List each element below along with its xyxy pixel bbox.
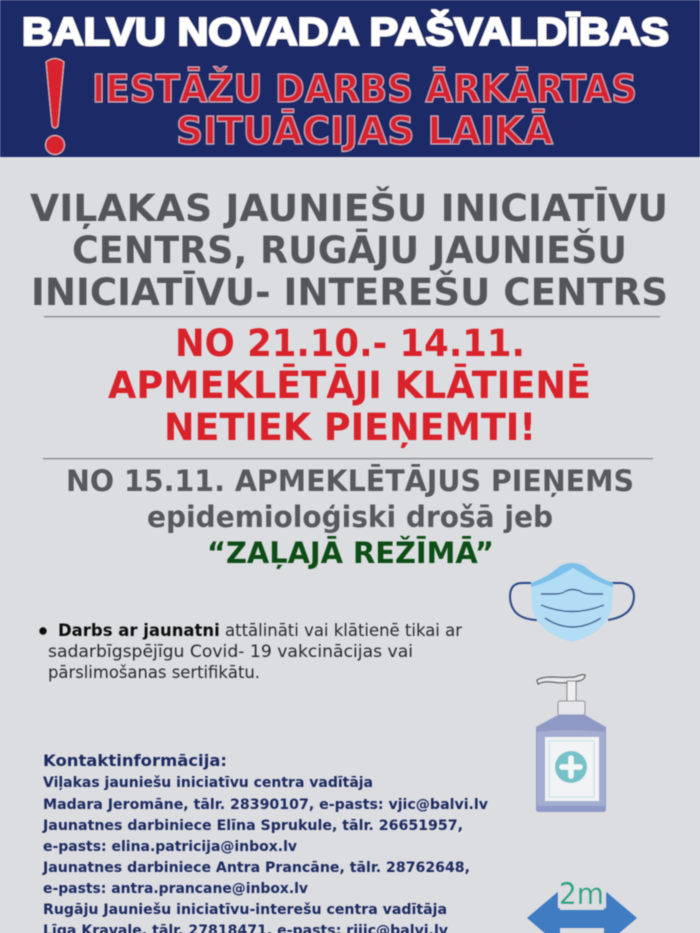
notice: visitors not accepted: NETIEK PIEŅEMTI! bbox=[164, 406, 536, 449]
bullet text: sadarbīgspējīgu Covid- 19 vakcinācijas vai bbox=[48, 642, 413, 661]
icon: exclamation mark bbox=[46, 58, 64, 154]
contact information: Jaunatnes darbiniece Elīna Sprukule, tālr. 26651957, bbox=[42, 818, 463, 834]
contact information bbox=[42, 751, 488, 933]
bullet text: pārslimošanas sertifikātu. bbox=[48, 663, 260, 682]
icon: face mask bbox=[510, 563, 634, 642]
heading: youth centres: VIĻAKAS JAUNIEŠU INICIATĪVU bbox=[30, 186, 668, 230]
bullet text bbox=[39, 621, 462, 682]
heading: youth centres bbox=[30, 186, 668, 314]
header subtitle: IESTĀŽU DARBS ĀRKĀRTAS bbox=[92, 67, 637, 111]
main text bbox=[30, 186, 668, 933]
contact information: Kontaktinformācija: bbox=[43, 751, 227, 770]
header subtitle bbox=[92, 67, 637, 153]
header subtitle: SITUĀCIJAS LAIKĀ bbox=[176, 109, 554, 153]
contact information: Madara Jeromāne, tālr. 28390107, e-pasts: vjic@balvi.lv bbox=[43, 797, 488, 813]
notice: green regime: NO 15.11. APMEKLĒTĀJUS PIEŅEMS bbox=[66, 464, 634, 498]
header title: BALVU NOVADA PAŠVALDĪBAS bbox=[22, 9, 669, 54]
heading: youth centres: INICIATĪVU- INTEREŠU CENTRS bbox=[31, 270, 668, 314]
notice: visitors not accepted: APMEKLĒTĀJI KLĀTIENĒ bbox=[108, 363, 591, 407]
notice: green regime bbox=[66, 464, 634, 570]
notice: green regime: epidemioloģiski drošā jeb bbox=[147, 500, 553, 534]
notice: visitors not accepted bbox=[108, 322, 591, 449]
heading: youth centres: CENTRS, RUGĀJU JAUNIEŠU bbox=[72, 228, 627, 272]
contact information: Viļakas jauniešu iniciatīvu centra vadītāja bbox=[43, 775, 373, 791]
icon: hand sanitizer bottle bbox=[536, 675, 606, 812]
contact information: Rugāju Jauniešu iniciatīvu-interešu centra vadītāja bbox=[43, 902, 447, 918]
icon: 2m distance arrow bbox=[527, 877, 637, 933]
contact information: e-pasts: elina.patricija@inbox.lv bbox=[43, 839, 297, 855]
icon: 2m distance arrow: 2m bbox=[559, 877, 604, 911]
contact information: e-pasts: antra.prancane@inbox.lv bbox=[43, 881, 308, 897]
header banner bbox=[0, 0, 700, 157]
contact information: Jaunatnes darbiniece Antra Prancāne, tālr. 28762648, bbox=[42, 860, 470, 876]
notice: visitors not accepted: NO 21.10.- 14.11. bbox=[175, 322, 525, 365]
bullet text: Darbs ar jaunatni attālināti vai klātienē tikai ar bbox=[58, 621, 462, 640]
notice: green regime: “ZAĻAJĀ REŽĪMĀ” bbox=[207, 536, 494, 570]
